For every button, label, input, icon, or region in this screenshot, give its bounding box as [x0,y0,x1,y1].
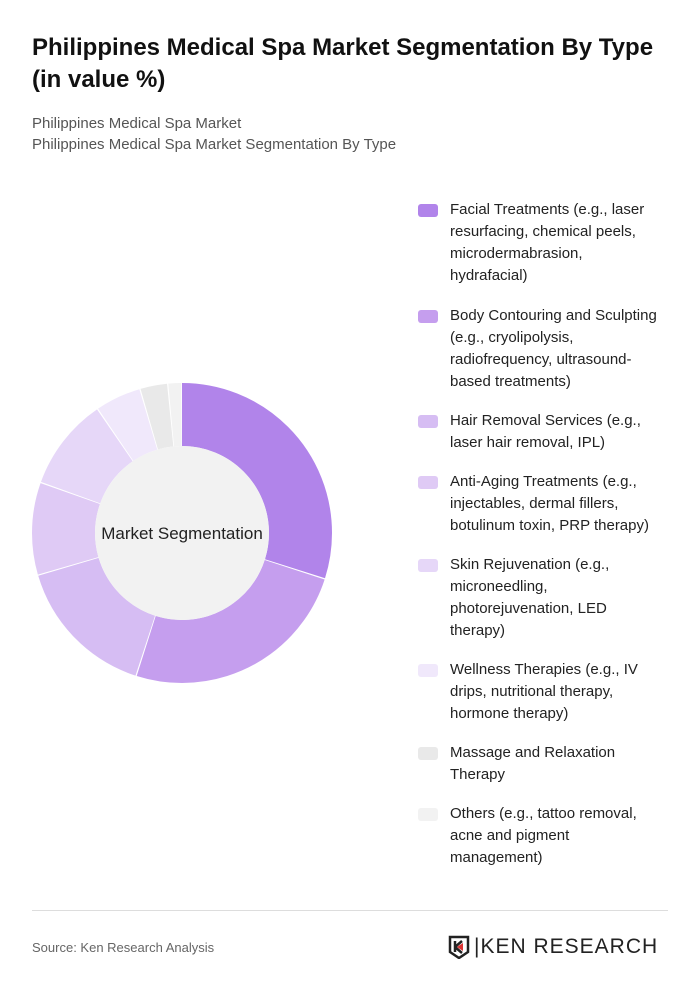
legend item 8: Others (e.g., tattoo removal, [450,805,637,822]
legend item 6: hormone therapy) [450,705,568,722]
logo: |KEN RESEARCH [474,935,658,958]
legend item 1: hydrafacial) [450,267,528,284]
legend item 1: microdermabrasion, [450,245,583,262]
source: Source: Ken Research Analysis [32,940,214,955]
legend item 2: radiofrequency, ultrasound- [450,351,632,368]
legend item 4 [418,473,649,534]
legend item 2: (e.g., cryolipolysis, [450,329,573,346]
legend item 5: Skin Rejuvenation (e.g., [450,556,609,573]
subtitle [32,115,396,153]
legend item 5: therapy) [450,622,505,639]
subtitle: Philippines Medical Spa Market [32,115,241,132]
donut chart [32,383,332,683]
legend item 5 [418,556,609,639]
legend item 2 [418,307,657,390]
legend item 2: based treatments) [450,373,571,390]
legend item 7: Therapy [450,766,505,783]
legend item 4: injectables, dermal fillers, [450,495,618,512]
legend item 2: Body Contouring and Sculpting [450,307,657,324]
legend item 3: Hair Removal Services (e.g., [450,412,641,429]
legend item 8: acne and pigment [450,827,569,844]
legend item 6 [418,661,638,722]
legend item 3: laser hair removal, IPL) [450,434,605,451]
legend item 7: Massage and Relaxation [450,744,615,761]
legend [418,201,657,866]
legend item 1: resurfacing, chemical peels, [450,223,636,240]
legend item 8 [418,805,637,866]
legend item 6: Wellness Therapies (e.g., IV [450,661,638,678]
legend item 5: photorejuvenation, LED [450,600,607,617]
title: Philippines Medical Spa Market Segmentation By Type (in value %) [32,34,653,93]
donut chart: Market Segmentation [101,524,263,543]
legend item 4: Anti-Aging Treatments (e.g., [450,473,637,490]
legend item 7 [418,744,615,783]
legend item 3 [418,412,641,451]
legend item 4: botulinum toxin, PRP therapy) [450,517,649,534]
legend item 6: drips, nutritional therapy, [450,683,613,700]
legend item 1: Facial Treatments (e.g., laser [450,201,644,218]
legend item 1 [418,201,644,284]
legend item 5: microneedling, [450,578,548,595]
legend item 8: management) [450,849,543,866]
subtitle: Philippines Medical Spa Market Segmentation By Type [32,136,396,153]
